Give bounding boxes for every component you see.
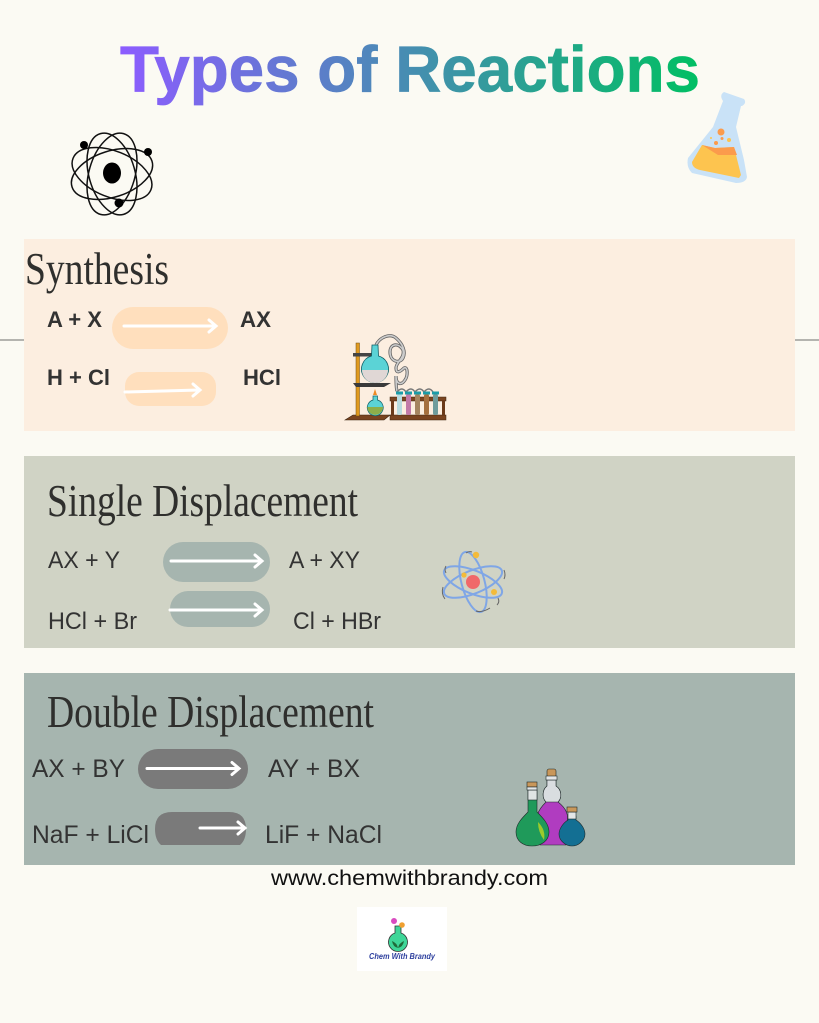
title: Types of Reactions <box>120 32 700 106</box>
equation: H + Cl: H + Cl <box>47 365 110 390</box>
panel: single displacement <box>24 456 795 648</box>
icon: coloured atom <box>440 549 506 615</box>
product: HCl: HCl <box>243 365 281 390</box>
product: AX: AX <box>240 307 271 332</box>
equation: NaF + LiCl: NaF + LiCl <box>32 821 149 849</box>
icon: black atom <box>64 127 160 221</box>
arrow pill 2 <box>125 372 216 406</box>
logo flask <box>388 918 408 952</box>
icon: potion bottles <box>516 769 585 846</box>
equation: AX + Y: AX + Y <box>48 547 120 574</box>
arrow pill 1 <box>112 307 228 349</box>
arrow pill 2 <box>170 591 270 627</box>
panel: double displacement <box>24 673 795 865</box>
arrow pill 1 <box>163 542 270 582</box>
equation: AX + BY: AX + BY <box>32 755 125 783</box>
icon: orange flask <box>688 92 747 183</box>
product: Cl + HBr: Cl + HBr <box>293 608 381 635</box>
equation: HCl + Br: HCl + Br <box>48 608 137 635</box>
arrow pill 1 <box>138 749 248 789</box>
website url: www.chemwithbrandy.com <box>270 866 548 890</box>
product: LiF + NaCl: LiF + NaCl <box>265 821 382 849</box>
heading: double displacement: Double Displacement <box>47 687 374 737</box>
logo text: Chem With Brandy <box>369 952 435 961</box>
heading: synthesis: Synthesis <box>25 244 169 294</box>
heading: single displacement: Single Displacement <box>47 476 358 526</box>
logo: Chem With Brandy <box>357 907 447 971</box>
icon: lab apparatus <box>345 336 446 420</box>
panel: synthesis <box>24 239 795 431</box>
product: A + XY: A + XY <box>289 547 360 574</box>
product: AY + BX: AY + BX <box>268 755 360 783</box>
equation: A + X: A + X <box>47 307 102 332</box>
arrow pill 2 <box>155 812 246 845</box>
